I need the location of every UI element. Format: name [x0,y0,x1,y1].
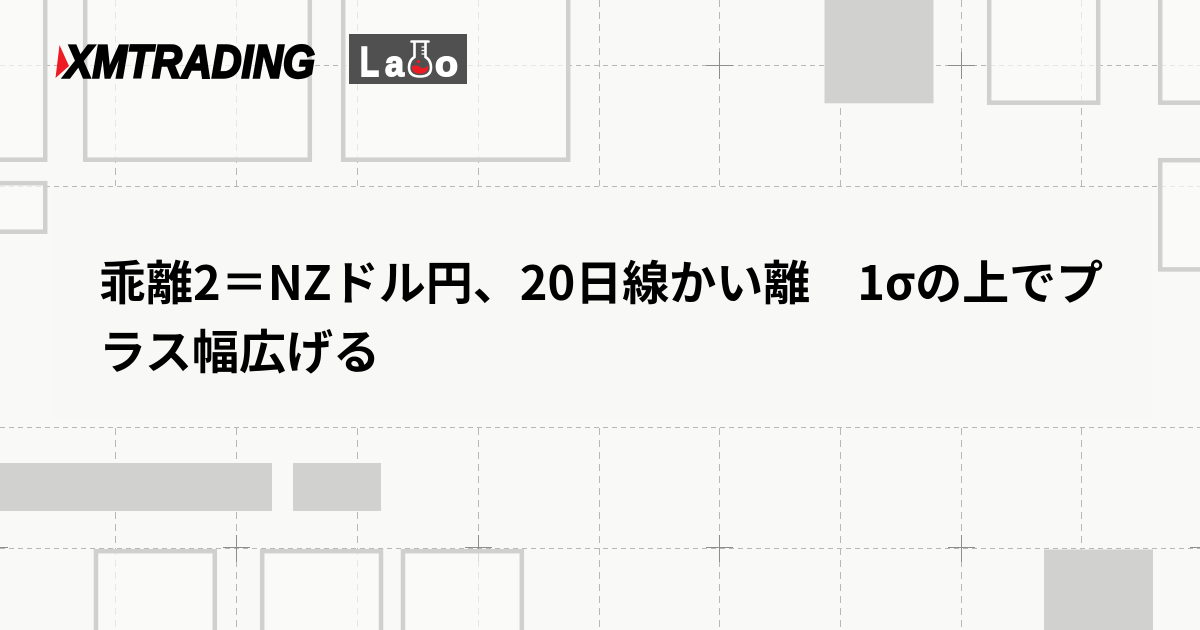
icon: red arrow [56,45,69,78]
outlined squares top [0,0,1200,269]
title: ラス幅広げる [99,314,380,383]
logo: XMTRADING: XMTRADING [62,36,315,88]
logo: Lab: o [435,43,458,84]
logo: Lab: a [385,43,405,84]
icon: flask [409,42,431,76]
title: 乖離2＝NZドル円、20日線かい離 1σの上でプ [99,245,1103,314]
outlined squares bottom [96,551,522,630]
panel: title background [52,187,1152,420]
title [99,245,1103,383]
logo: Lab: L [360,38,379,85]
logo: Lab [349,34,467,85]
